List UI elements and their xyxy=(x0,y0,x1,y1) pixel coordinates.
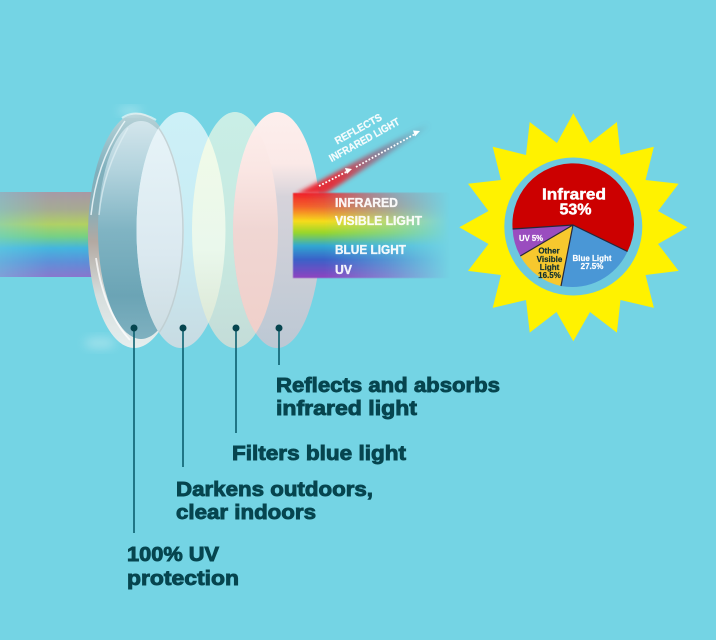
label: darkens outdoors: Darkens outdoors, xyxy=(176,478,373,501)
dotted arrow xyxy=(319,130,420,186)
slice: other visible light 16.5% xyxy=(520,225,573,286)
blue filter and infrared overlap xyxy=(233,126,278,334)
slice dividers xyxy=(513,225,628,286)
label: UV protection: 100% UV xyxy=(127,543,219,566)
infrared lens xyxy=(233,112,321,348)
UV value: UV 5% xyxy=(519,234,543,243)
label: reflects and absorbs infrared: Reflects and absorbs xyxy=(276,374,500,397)
label: darkens outdoors: clear indoors xyxy=(176,501,316,524)
glass and photochromic overlap xyxy=(136,128,184,333)
spectrum labels: UV xyxy=(335,263,353,277)
label: UV protection xyxy=(127,543,239,590)
spectrum labels: INFRARED xyxy=(335,196,398,210)
slice: infrared 53% xyxy=(512,163,634,252)
spectrum labels: VISIBLE LIGHT xyxy=(335,214,422,228)
sun pie chart xyxy=(459,113,687,341)
other visible light value: 16.5% xyxy=(538,271,561,280)
infrared value: 53% xyxy=(559,202,592,218)
blue light value: Blue Light xyxy=(572,254,612,263)
other visible light value: Other xyxy=(538,246,560,256)
spectrum labels xyxy=(335,196,422,277)
slice: blue light 27.5% xyxy=(561,225,628,287)
left light beam entering lens xyxy=(0,192,100,277)
reflected infrared beam xyxy=(296,122,431,194)
callout line: darkens outdoors xyxy=(180,324,186,467)
callout line: filters blue light xyxy=(232,324,240,433)
infographic canvas xyxy=(0,104,688,590)
label: filters blue light: Filters blue light xyxy=(232,442,406,465)
label: reflects and absorbs infrared xyxy=(276,374,500,420)
other visible light value: Visible xyxy=(537,255,563,264)
blue light filter lens xyxy=(192,112,278,348)
right spectrum beam xyxy=(293,193,458,278)
photochromic and blue filter overlap xyxy=(192,138,226,322)
label: darkens outdoors xyxy=(176,478,373,524)
glass UV lens xyxy=(86,112,186,349)
label: UV protection: protection xyxy=(127,567,239,590)
pie backing ring xyxy=(504,158,642,296)
photochromic lens xyxy=(136,112,226,348)
callout line: reflects infrared xyxy=(276,324,282,365)
other visible light value: Light xyxy=(540,263,560,272)
reflects infrared label: INFRARED LIGHT xyxy=(327,116,402,165)
callout line: UV protection xyxy=(130,324,138,533)
blue light value: 27.5% xyxy=(581,262,603,271)
sun shape xyxy=(459,113,687,341)
slice: UV 5% xyxy=(513,225,573,256)
infrared value xyxy=(542,186,606,218)
lens stack xyxy=(86,112,321,349)
other visible light value xyxy=(537,246,563,280)
reflects infrared label: REFLECTS xyxy=(333,112,384,147)
infrared value: Infrared xyxy=(542,186,606,204)
label: reflects and absorbs infrared: infrared light xyxy=(276,397,417,420)
blue light value xyxy=(572,254,612,271)
spectrum labels: BLUE LIGHT xyxy=(335,243,406,257)
lens highlights xyxy=(84,108,142,348)
